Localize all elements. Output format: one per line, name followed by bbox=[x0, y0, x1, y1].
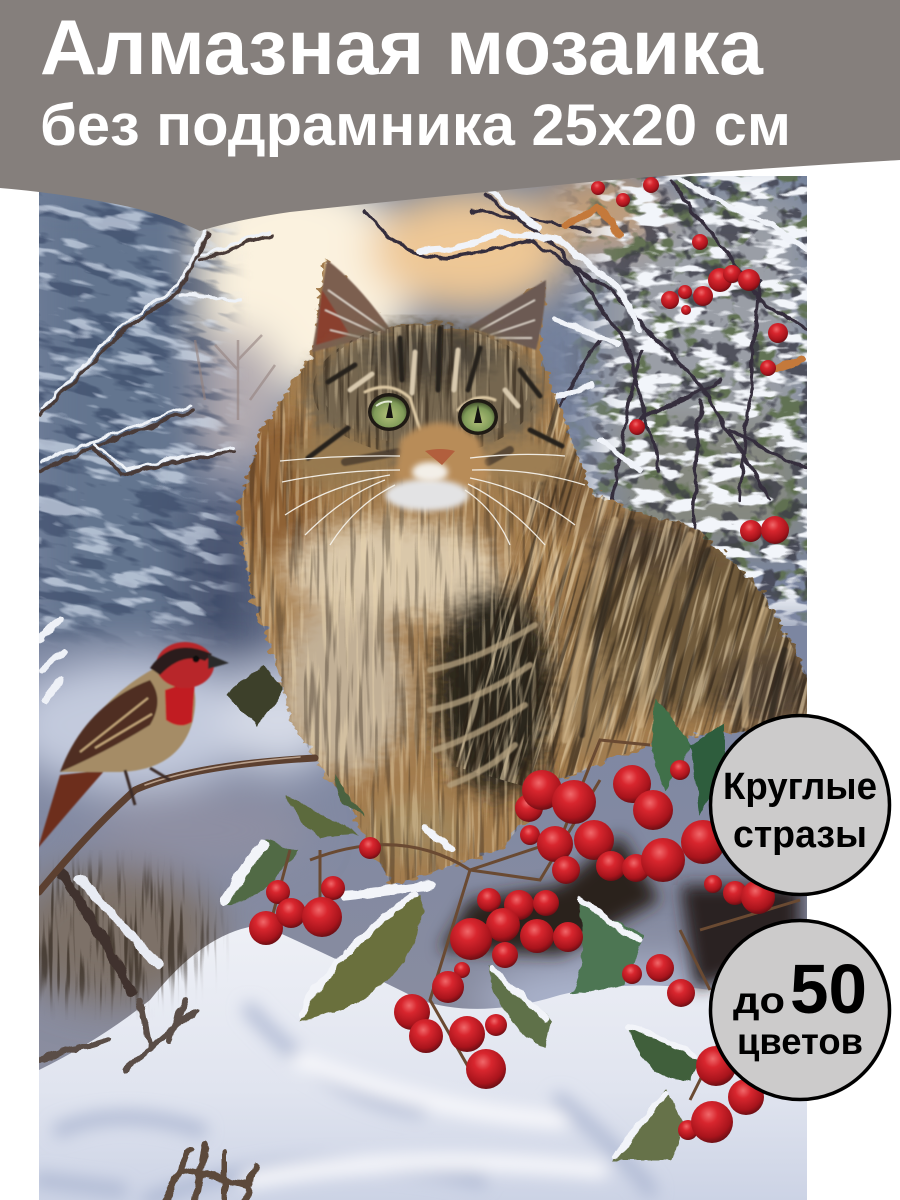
cat fur texture and stripes bbox=[240, 258, 807, 884]
nose bbox=[425, 449, 455, 465]
bird red breast bbox=[165, 680, 195, 726]
bird tail bbox=[38, 770, 105, 848]
snowy branches on the right bbox=[365, 176, 807, 626]
badge: round rhinestones: Круглые bbox=[723, 766, 877, 808]
badge: round rhinestones: стразы bbox=[733, 814, 867, 856]
head fur bbox=[290, 323, 568, 488]
bird wing bbox=[60, 680, 158, 772]
snow ground bbox=[39, 925, 807, 1200]
forehead stripes bbox=[308, 328, 562, 462]
badge: round rhinestones bbox=[710, 716, 890, 894]
badge: up to 50 colours bbox=[710, 920, 890, 1100]
fir tree boughs bbox=[39, 192, 274, 643]
dry shrubs in the snow bbox=[39, 620, 259, 1200]
badge: up to 50 colours: 50 bbox=[790, 950, 867, 1028]
branch under the bird bbox=[39, 757, 315, 892]
distant bare trees bbox=[195, 335, 275, 420]
holly leaves bbox=[225, 665, 800, 1160]
muzzle bbox=[395, 422, 490, 492]
berry stems bbox=[270, 740, 800, 1100]
bird bbox=[38, 642, 229, 848]
bird body bbox=[60, 668, 195, 772]
badge: up to 50 colours: до bbox=[733, 980, 785, 1021]
subtitle: без подрамника 25х20 см bbox=[40, 93, 791, 158]
title: Алмазная мозаика bbox=[40, 3, 764, 91]
bird head bbox=[156, 642, 214, 688]
cat body base colours bbox=[230, 250, 820, 900]
header banner bbox=[0, 0, 900, 231]
whiskers bbox=[280, 454, 585, 545]
red berries bbox=[249, 177, 789, 1143]
right eye bbox=[458, 399, 498, 435]
cat ears bbox=[312, 260, 546, 352]
left eye bbox=[368, 393, 410, 431]
painting: cat, bird and berries in winter bbox=[39, 176, 807, 1200]
cat bbox=[236, 258, 807, 884]
badge: up to 50 colours: цветов bbox=[737, 1021, 863, 1062]
bird legs bbox=[125, 768, 170, 805]
cat head bbox=[280, 323, 585, 545]
background: sky glow and forest bbox=[5, 170, 807, 1040]
head fur texture bbox=[313, 324, 537, 456]
